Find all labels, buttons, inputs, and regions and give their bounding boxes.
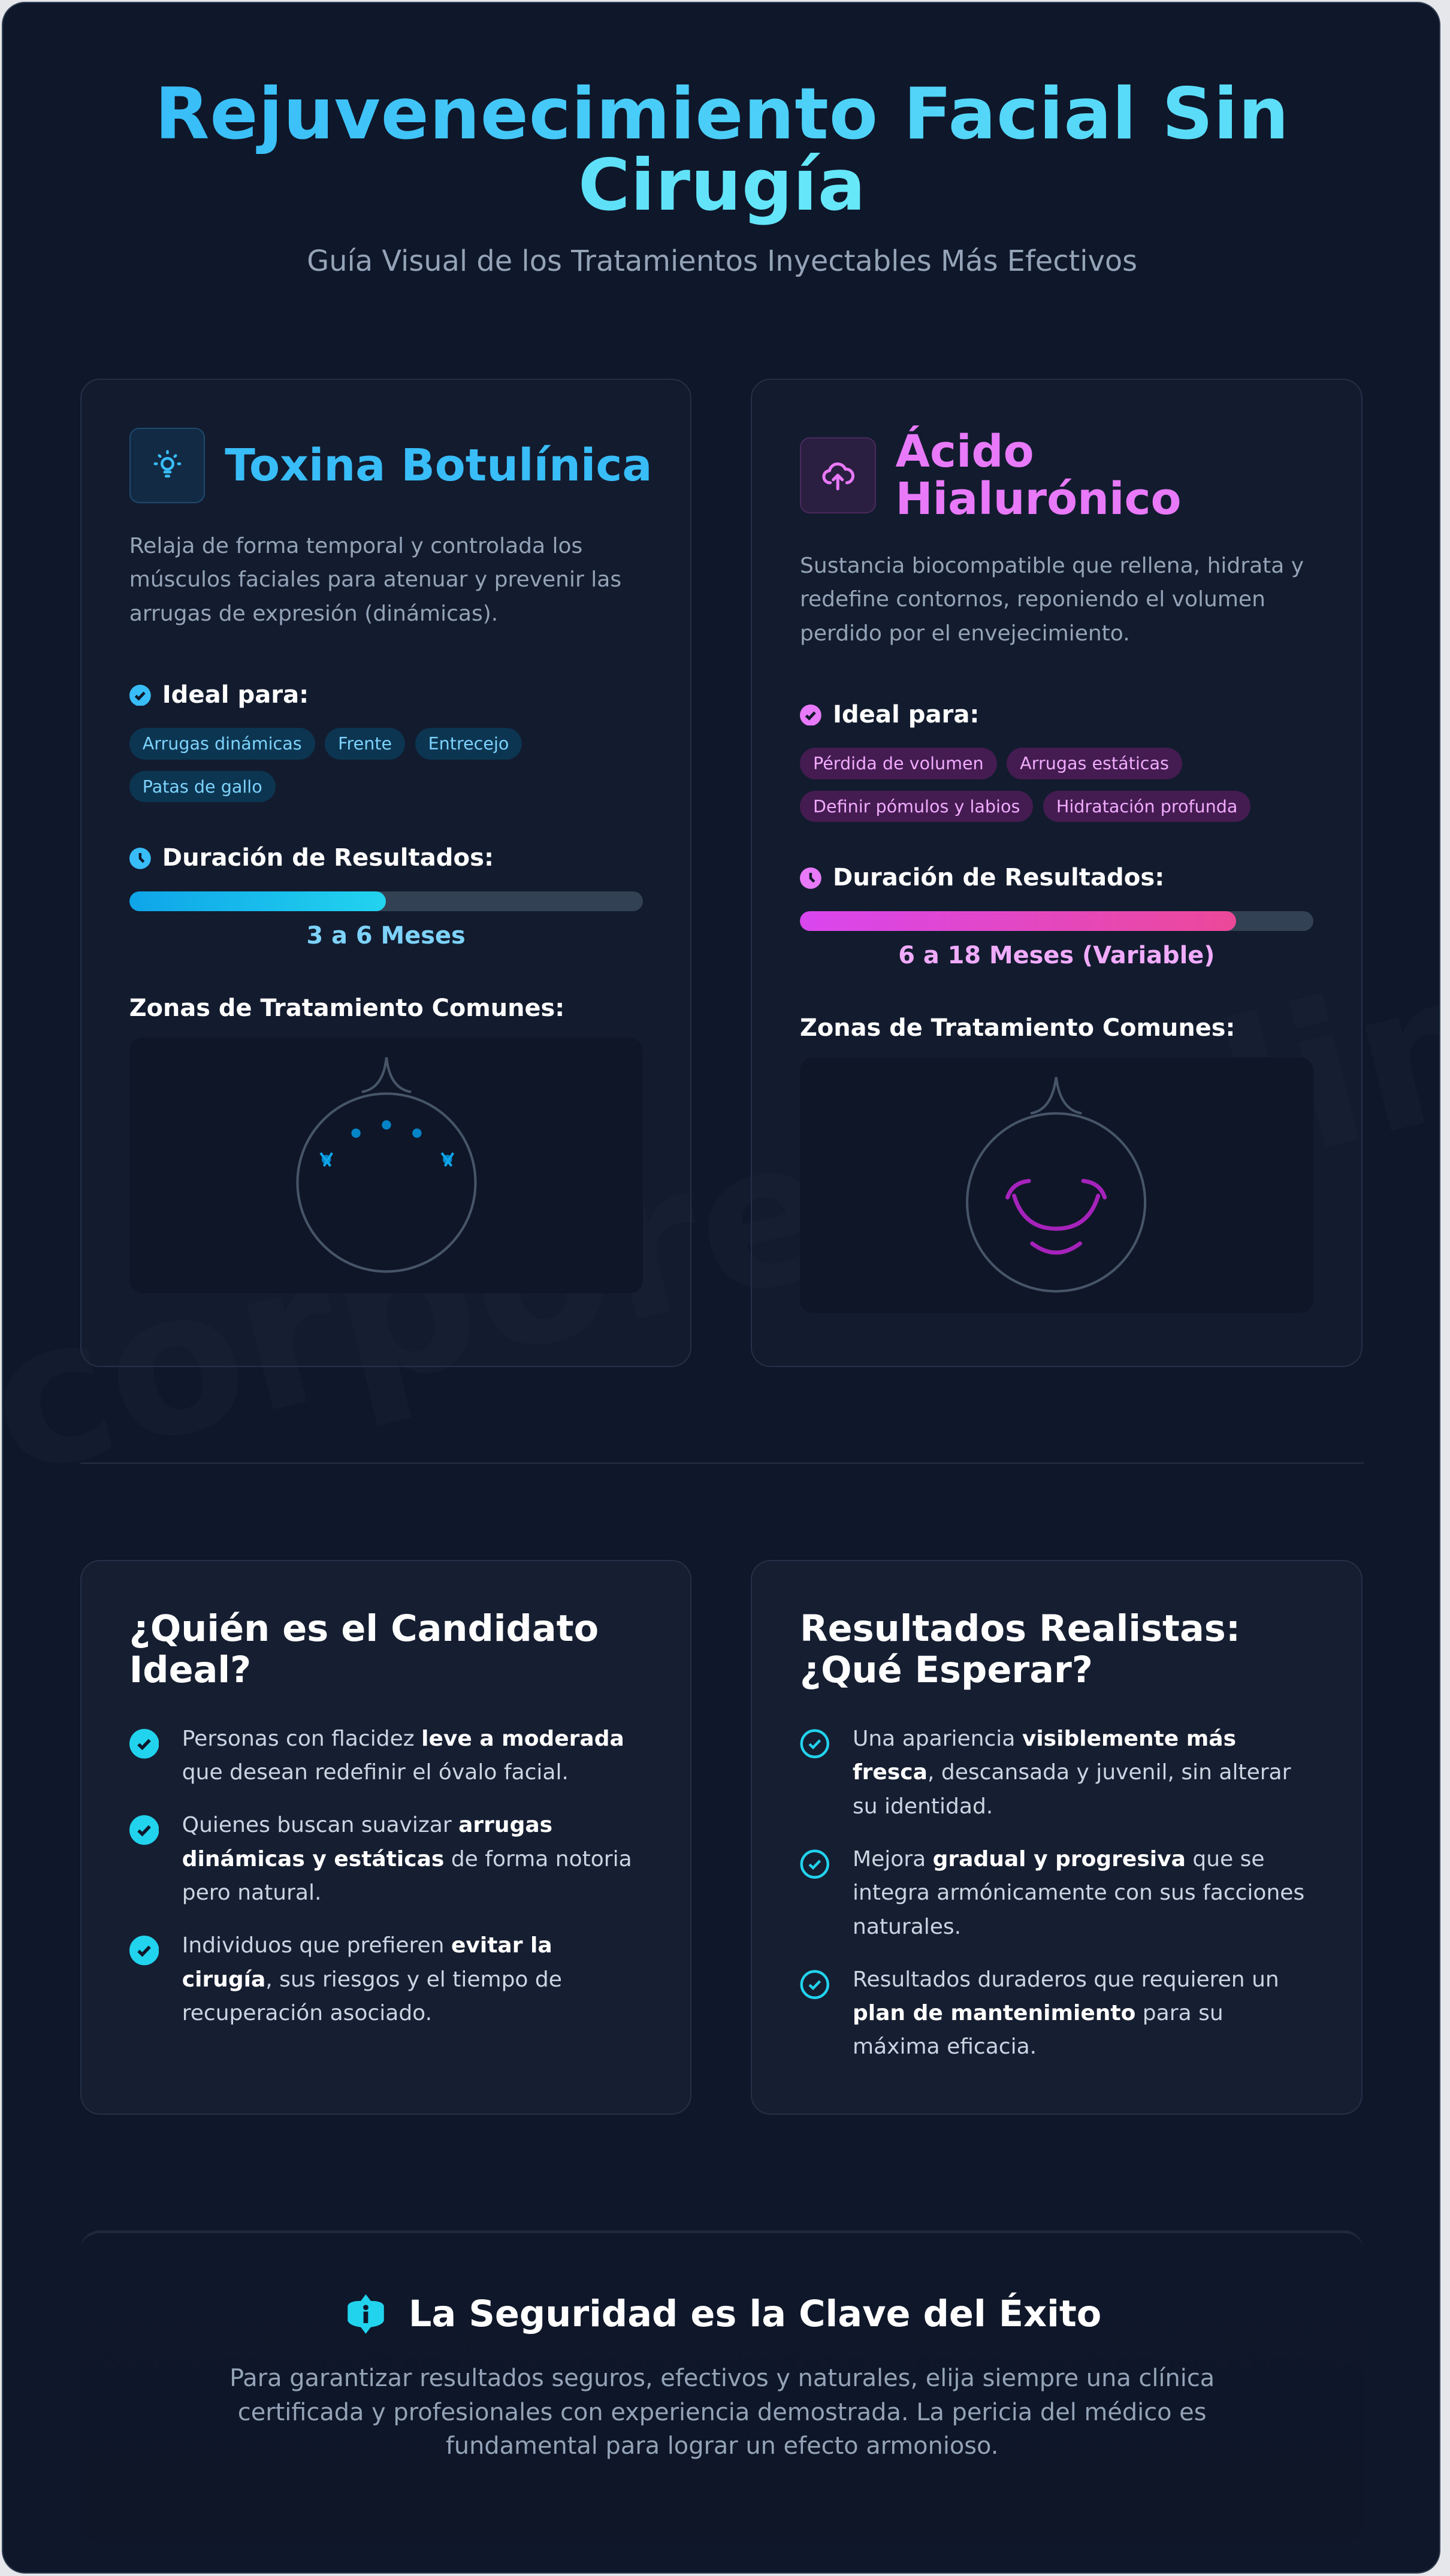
duration heading: Duración de Resultados:: [833, 864, 1164, 891]
icon: shield: [348, 2294, 384, 2334]
duration heading: Duración de Resultados:: [162, 844, 494, 872]
icon: cloud upload: [800, 437, 876, 513]
tags: Hidratación profunda: [1056, 796, 1237, 817]
tags: Arrugas dinámicas: [143, 733, 302, 754]
ideal para heading: Ideal para:: [833, 701, 979, 728]
tags: [800, 748, 1250, 822]
card title: Toxina Botulínica: [225, 439, 652, 491]
description: Relaja de forma temporal y controlada los músculos faciales para atenuar y prevenir las arrugas de expresión (dinámicas).: [129, 534, 621, 626]
tags: Entrecejo: [428, 733, 509, 754]
checklist: Individuos que prefieren evitar la cirugía, sus riesgos y el tiempo de recuperación asociado.: [182, 1933, 562, 2025]
tags: Frente: [338, 733, 392, 754]
tags: [129, 728, 522, 802]
zonas heading: Zonas de Tratamiento Comunes:: [129, 994, 564, 1022]
zonas heading: Zonas de Tratamiento Comunes:: [800, 1014, 1235, 1042]
panel: safety footer: [80, 2230, 1364, 2543]
card title: Hialurónico: [895, 473, 1181, 525]
header: toxina: [129, 428, 652, 503]
title: Cirugía: [578, 144, 866, 226]
checklist: Una apariencia visiblemente más fresca, descansada y juvenil, sin alterar su identidad.: [853, 1727, 1291, 1819]
header: hialuronico: [800, 425, 1181, 525]
title: Rejuvenecimiento Facial Sin: [155, 72, 1289, 155]
heading: Resultados Realistas: ¿Qué Esperar?: [800, 1608, 1240, 1691]
tags: Definir pómulos y labios: [813, 796, 1020, 817]
duration bar: [129, 891, 642, 911]
checklist: [129, 1727, 632, 2025]
face diagram: botox: [129, 1038, 642, 1293]
checklist: Quienes buscan suavizar arrugas dinámicas y estáticas de forma notoria pero natural.: [182, 1813, 632, 1905]
duration bar: [800, 911, 1313, 931]
subtitle: Guía Visual de los Tratamientos Inyectables Más Efectivos: [307, 245, 1137, 278]
footer paragraph: Para garantizar resultados seguros, efectivos y naturales, elija siempre una clínica certificada y profesionales con experiencia demostrada. La pericia del médico es fundamental para lograr un efecto armonioso.: [229, 2365, 1215, 2460]
panel: resultados realistas: [751, 1560, 1363, 2115]
tags: Pérdida de volumen: [813, 753, 984, 773]
checklist: Personas con flacidez leve a moderada que desean redefinir el óvalo facial.: [182, 1727, 624, 1785]
checklist: Mejora gradual y progresiva que se integra armónicamente con sus facciones naturales.: [853, 1847, 1304, 1939]
card title: [895, 425, 1181, 525]
duration label: 3 a 6 Meses: [307, 922, 466, 950]
tags: Arrugas estáticas: [1020, 753, 1169, 773]
tags: Patas de gallo: [143, 776, 262, 797]
icon: lightbulb: [129, 428, 205, 503]
description: Sustancia biocompatible que rellena, hidrata y redefine contornos, reponiendo el volumen perdido por el envejecimiento.: [800, 554, 1304, 646]
duration label: 6 a 18 Meses (Variable): [898, 942, 1215, 969]
checklist: Resultados duraderos que requieren un plan de mantenimiento para su máxima eficacia.: [853, 1967, 1279, 2059]
ideal para heading: Ideal para:: [162, 681, 309, 709]
panel: acido hialuronico: [751, 379, 1363, 1367]
heading: ¿Quién es el Candidato Ideal?: [129, 1608, 599, 1691]
face diagram: filler: [800, 1057, 1313, 1313]
title: [155, 72, 1289, 226]
footer heading: La Seguridad es la Clave del Éxito: [409, 2293, 1101, 2335]
panel: candidato ideal: [80, 1560, 691, 2115]
panel: toxina botulinica: [80, 379, 691, 1367]
checklist: [800, 1727, 1304, 2059]
card title: Ácido: [895, 425, 1034, 477]
